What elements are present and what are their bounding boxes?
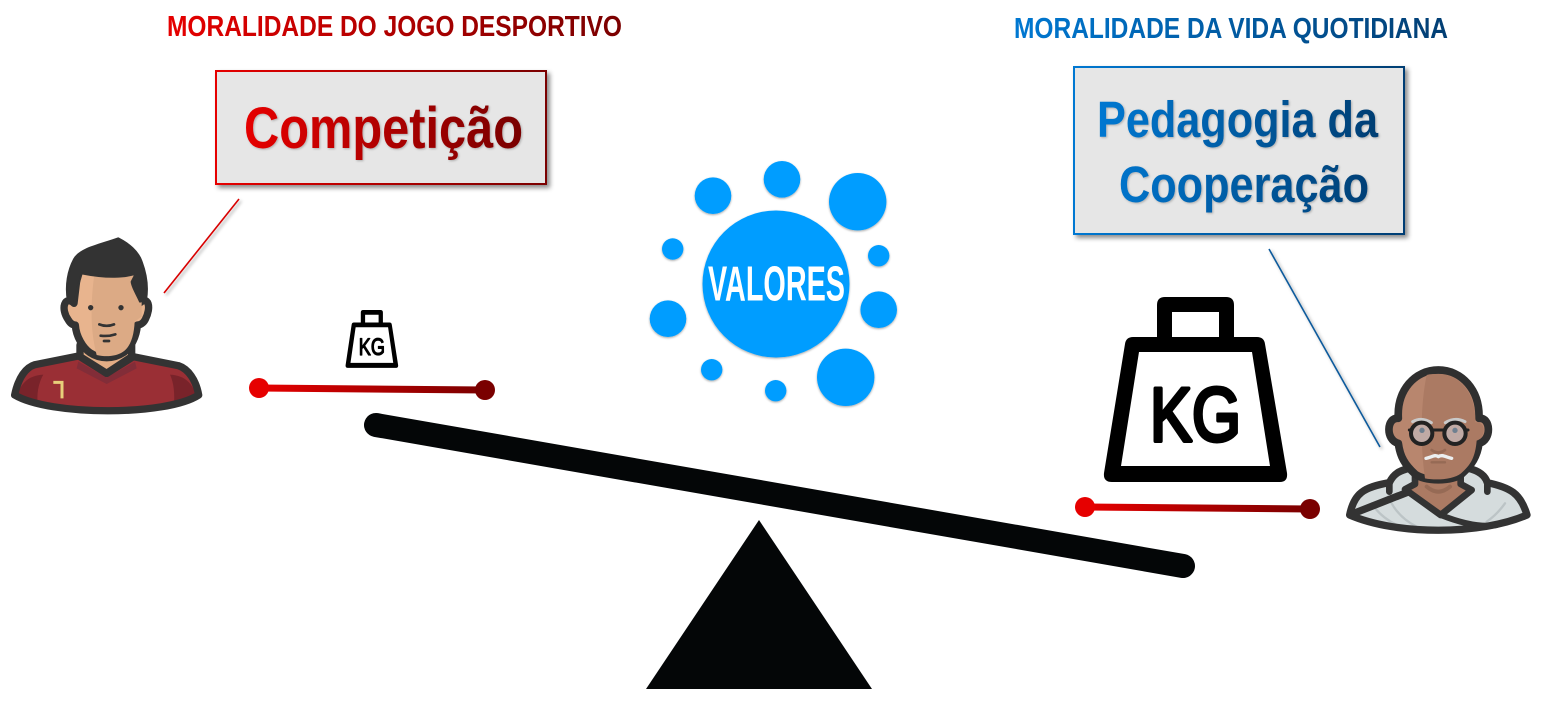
seesaw beam	[376, 425, 1183, 566]
icon: football player avatar	[15, 238, 199, 411]
icon: small weight KG: KG	[359, 333, 385, 360]
label: valores: VALORES	[708, 258, 845, 312]
connector: competição to player	[164, 199, 239, 293]
panel: pedagogia da cooperação	[1074, 67, 1404, 234]
icon: large weight KG	[1104, 297, 1287, 482]
icon: small weight KG	[346, 310, 398, 368]
right plank	[1075, 497, 1320, 519]
heading: moralidade da vida quotidiana: MORALIDADE DA VIDA QUOTIDIANA	[1014, 13, 1448, 45]
valores bubble cluster	[650, 161, 897, 406]
left plank	[249, 378, 495, 400]
icon: large weight KG: KG	[1150, 373, 1241, 458]
panel: competição	[216, 71, 546, 184]
heading: moralidade do jogo desportivo: MORALIDADE DO JOGO DESPORTIVO	[167, 11, 622, 43]
panel: pedagogia da cooperação: Cooperação	[1119, 156, 1369, 213]
panel: competição: Competição	[244, 96, 523, 161]
icon: elder with round glasses avatar	[1350, 370, 1527, 530]
seesaw fulcrum triangle	[646, 520, 872, 689]
connector: cooperação to elder	[1269, 249, 1380, 447]
panel: pedagogia da cooperação: Pedagogia da	[1097, 91, 1379, 148]
